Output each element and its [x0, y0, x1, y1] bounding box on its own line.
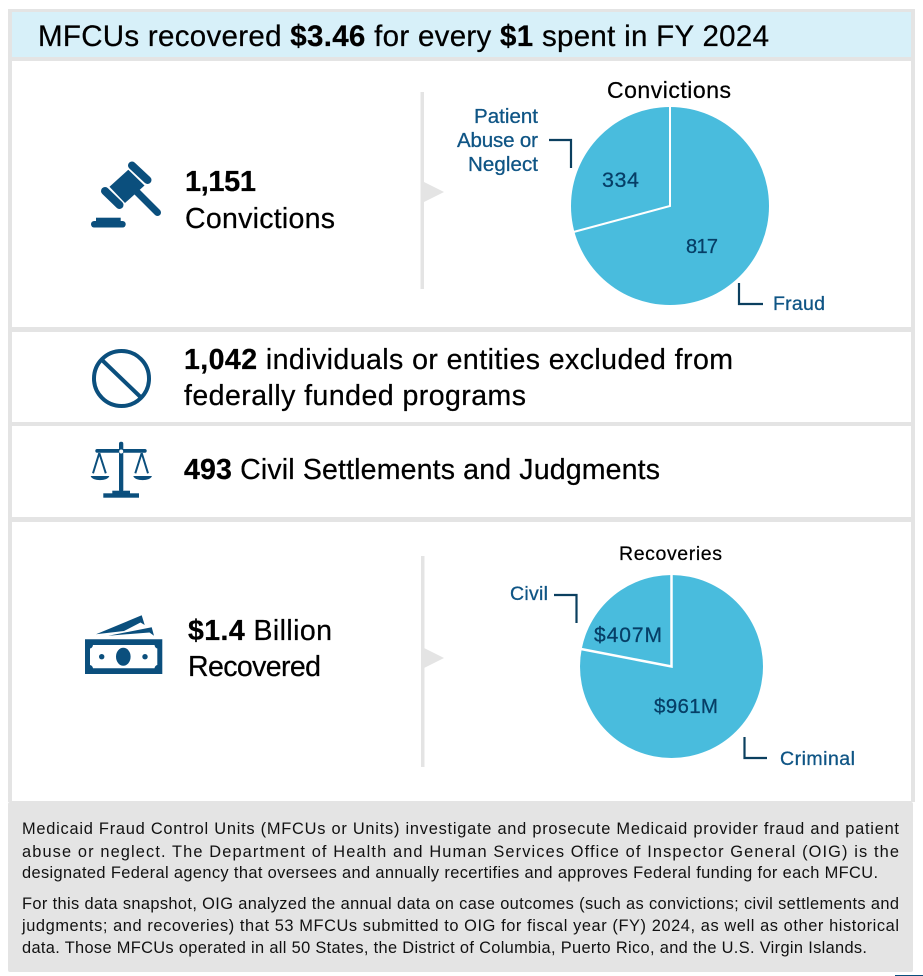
panel: civil settlements: [12, 426, 911, 517]
arrow: divider: [421, 556, 444, 767]
text block: about MFCUs: Medicaid Fraud Control Units (MFCUs or Units) investigate and prosecute Medicaid provider fraud and patient: [22, 820, 899, 838]
value: 334: 334: [602, 168, 639, 192]
label: Criminal: Criminal: [780, 748, 855, 770]
stat: recoveries: [188, 615, 332, 683]
icon: scales: [91, 442, 152, 498]
stat: exclusions: [184, 344, 733, 412]
arrow: divider: [420, 92, 444, 289]
icon: prohibited sign: [94, 351, 149, 406]
title: MFCUs recovered $3.46 for every $1 spent in FY 2024: [38, 20, 769, 53]
stat: convictions: 1,151: [185, 166, 256, 198]
panel: footer description: [8, 802, 913, 972]
label: Patient Abuse or Neglect: Patient: [474, 105, 538, 128]
label: Fraud: [739, 283, 825, 315]
panel: exclusions: [12, 332, 911, 422]
text block: data snapshot method: [21, 895, 899, 957]
text block: about MFCUs: abuse or neglect. The Department of Health and Human Services Office of Inspector General (OIG) is the: [22, 843, 899, 861]
label: Criminal: [744, 737, 855, 770]
label: Civil: [510, 583, 576, 623]
label: Patient Abuse or Neglect: Neglect: [468, 153, 538, 176]
chart heading: Recoveries: Recoveries: [619, 543, 722, 565]
label: Patient Abuse or Neglect: Abuse or: [457, 129, 538, 152]
chart heading: Convictions: Convictions: [607, 77, 731, 103]
text block: about MFCUs: [22, 820, 899, 882]
stat: civil settlements: 493 Civil Settlements and Judgments: [184, 454, 660, 486]
pie chart: recoveries: [580, 575, 763, 758]
label: Patient Abuse or Neglect: [457, 105, 571, 176]
stat: exclusions: federally funded programs: [184, 380, 526, 412]
pie chart: convictions: [571, 107, 769, 305]
value: $407M: $407M: [594, 624, 662, 647]
panel: title banner: [12, 12, 911, 57]
stat: convictions: [185, 166, 335, 235]
stat: recoveries: Recovered: [188, 651, 321, 683]
value: 817: 817: [686, 236, 718, 258]
text block: data snapshot method: data. Those MFCUs operated in all 50 States, the District of Columbia, Puerto Rico, and the U.S. Virgin Islands.: [22, 939, 867, 957]
stat: recoveries: $1.4 Billion: [188, 615, 332, 647]
text block: data snapshot method: For this data snapshot, OIG analyzed the annual data on case outcomes (such as convictions; civil settlements and: [22, 895, 899, 913]
label: Fraud: Fraud: [773, 293, 825, 315]
text block: data snapshot method: judgments; and recoveries) that 53 MFCUs submitted to OIG for fiscal year (FY) 2024, as well as other historical: [21, 917, 899, 935]
stat: exclusions: 1,042 individuals or entities excluded from: [184, 344, 733, 376]
panel: convictions: [12, 61, 911, 327]
icon: money: [85, 615, 162, 674]
icon: gavel: [91, 166, 158, 228]
text block: about MFCUs: designated Federal agency that oversees and annually recertifies and approves Federal funding for each MFCU.: [22, 864, 878, 882]
panel: recoveries: [12, 522, 911, 801]
stat: convictions: Convictions: [185, 203, 335, 235]
value: $961M: $961M: [654, 695, 718, 718]
label: Civil: Civil: [510, 583, 548, 605]
